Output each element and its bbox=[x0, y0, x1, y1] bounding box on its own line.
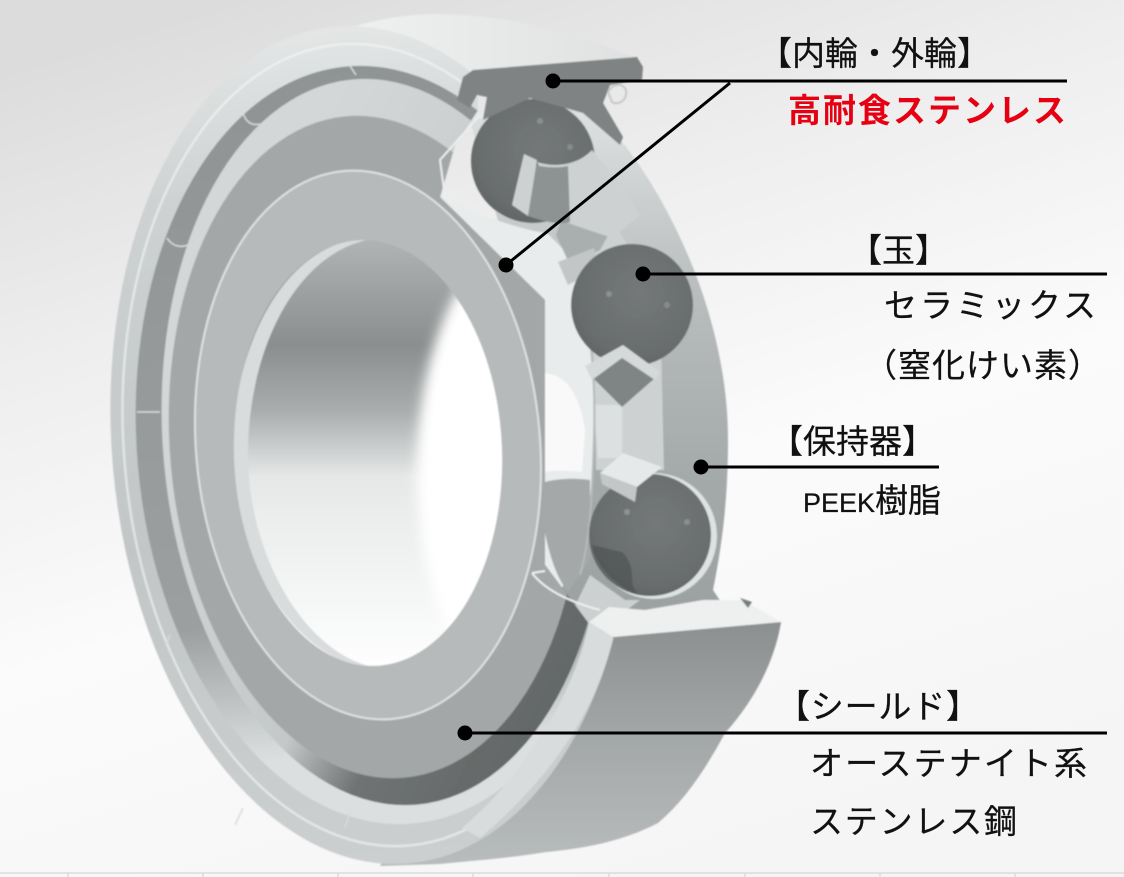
cage wedge between balls 2 and 3 bbox=[585, 345, 660, 407]
inner race shaded patch bbox=[540, 479, 590, 592]
outer ring top surface bbox=[250, 14, 642, 110]
rim highlight bbox=[121, 43, 466, 848]
cut edge shield profile bbox=[532, 571, 600, 610]
callout: shield: 【シールド】 bbox=[777, 688, 979, 725]
shield profile at top cut bbox=[440, 115, 480, 197]
callout: shield: オーステナイト系 bbox=[810, 745, 1087, 782]
outer rim bbox=[110, 27, 614, 864]
outer ring section top bbox=[457, 57, 643, 145]
front rings bbox=[110, 27, 614, 864]
callout: shield bbox=[458, 688, 1107, 840]
ball 3 bbox=[589, 474, 711, 596]
cage light block above ball 3 bbox=[600, 453, 662, 502]
seal groove bbox=[135, 65, 589, 824]
bearing interior bbox=[440, 99, 728, 632]
cage pocket rim of ball 3 bbox=[591, 473, 717, 599]
cage shaded strip bbox=[556, 217, 610, 265]
callout: cage bbox=[694, 423, 941, 519]
bottom ruler ticks bbox=[0, 873, 1124, 877]
section shield lip bbox=[608, 85, 626, 103]
outer ring lower cylinder bbox=[380, 622, 781, 866]
inner race light band bbox=[440, 197, 594, 590]
outer ring section bottom bbox=[462, 598, 781, 838]
shield back band bbox=[160, 78, 588, 806]
race edge line bbox=[577, 263, 594, 575]
callout: cage: PEEK樹脂 bbox=[803, 482, 941, 519]
shield face bbox=[168, 115, 568, 779]
bore bbox=[234, 240, 503, 667]
callout: inner and outer ring bbox=[498, 35, 1067, 272]
cage over ball 1 bbox=[512, 150, 640, 238]
ball 1 bbox=[471, 99, 595, 223]
callout: ball bbox=[636, 232, 1107, 384]
callout: ball: 【玉】 bbox=[849, 232, 948, 269]
inner race highlight bbox=[540, 373, 585, 473]
groove notches bbox=[137, 66, 356, 828]
cage piece left of ball 2 bbox=[558, 248, 600, 285]
lower race bracket bbox=[572, 575, 640, 630]
callout: shield: ステンレス鋼 bbox=[810, 803, 1017, 840]
inner ring bbox=[193, 168, 600, 722]
bearing illustration bbox=[76, 4, 781, 877]
cage column and upper body bbox=[520, 135, 664, 470]
callout: ball: （窒化けい素） bbox=[864, 347, 1101, 384]
cage highlight beside column bbox=[594, 405, 622, 458]
ball 2 bbox=[571, 244, 693, 366]
callout: inner and outer ring: 高耐食ステンレス bbox=[788, 92, 1066, 129]
outer race band bbox=[470, 105, 728, 632]
callout: ball: セラミックス bbox=[884, 287, 1096, 324]
callout: inner and outer ring: 【内輪・外輪】 bbox=[759, 35, 990, 72]
callout: cage: 【保持器】 bbox=[770, 423, 935, 460]
